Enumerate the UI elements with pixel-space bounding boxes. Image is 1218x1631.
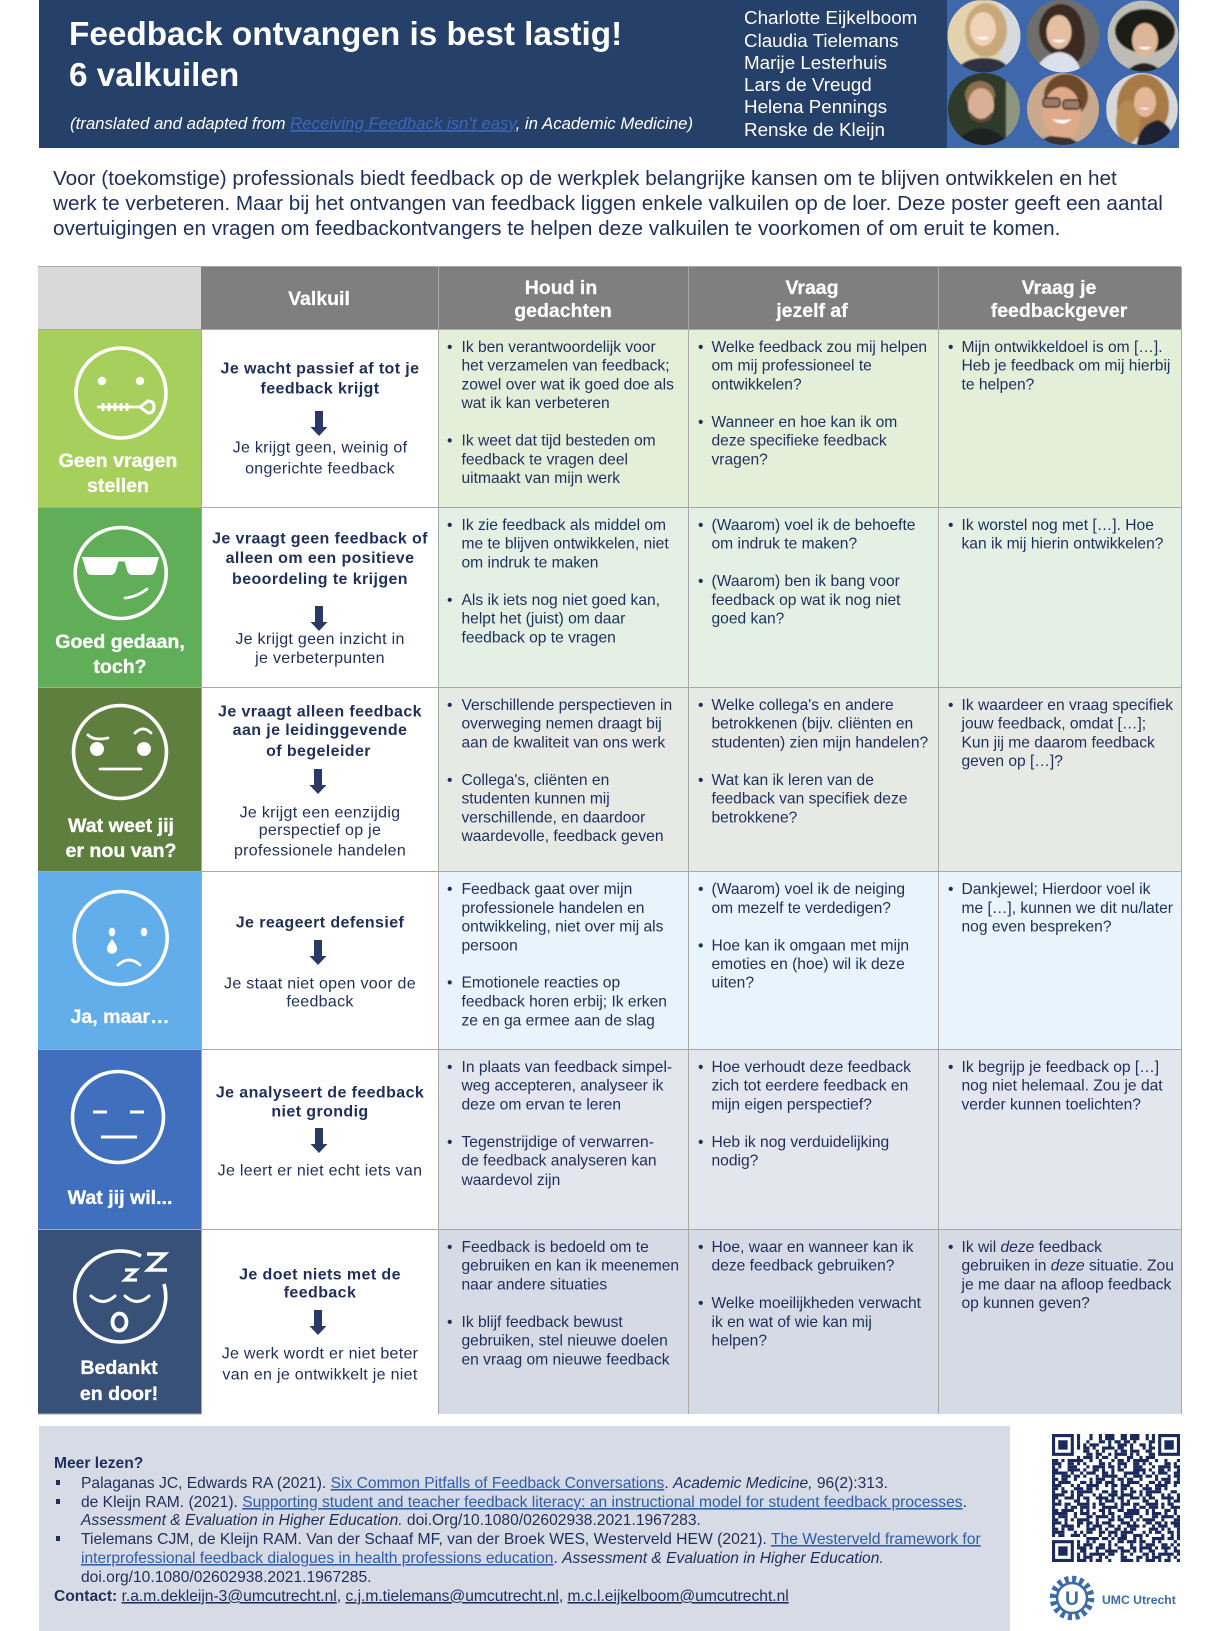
further reading panel — [39, 1426, 1010, 1631]
column heading: Vraag je feedbackgever: Vraag je — [1022, 277, 1097, 299]
thoughts cell: Ik zie feedback als middel om — [462, 517, 666, 534]
photo: Marije — [1107, 0, 1179, 76]
self-questions cell: ik en wat of wie kan mij — [712, 1314, 872, 1331]
thoughts cell: • — [447, 1239, 452, 1256]
thoughts cell: verschillende, en daardoor — [462, 809, 645, 826]
self-questions cell: Wat kan ik leren van de — [712, 772, 874, 789]
photo: Claudia — [1026, 0, 1100, 76]
self-questions cell: • — [698, 937, 703, 954]
questions for giver cell: • — [948, 1059, 953, 1076]
pitfall cell: Je doet niets met de — [239, 1266, 401, 1284]
self-questions cell — [698, 881, 909, 992]
logo mark: U — [1065, 1589, 1079, 1610]
self-questions cell — [698, 697, 929, 826]
pitfall cell: Je krijgt geen, weinig of — [233, 440, 408, 456]
questions for giver cell: Kun jij me daarom feedback — [962, 734, 1155, 751]
reference 3: interprofessional feedback dialogues in health professions education. Assessment & Evaluation in Higher Education. — [81, 1550, 884, 1567]
arrow — [310, 940, 326, 965]
reference 3 — [56, 1531, 981, 1586]
self-questions cell: betrokkenen (bijv. cliënten en — [712, 716, 913, 733]
thoughts cell: om indruk te maken — [462, 554, 598, 571]
reference 3: Tielemans CJM, de Kleijn RAM. Van der Schaaf MF, van der Broek WES, Westerveld HEW (2021). The Westerveld framework for — [81, 1531, 981, 1548]
photo: Lars — [947, 72, 1022, 148]
label: stellen — [87, 475, 149, 497]
reference 2 — [56, 1494, 967, 1529]
thoughts cell: • — [447, 697, 452, 714]
introduction text: werk te verbeteren. Maar bij het ontvangen van feedback liggen enkele valkuilen op de loer. Deze poster geeft een aantal — [52, 192, 1163, 215]
thoughts cell: Feedback is bedoeld om te — [462, 1239, 649, 1256]
introduction text: overtuigingen en vragen om feedbackontvangers te helpen deze valkuilen te voorkomen of om eruit te komen. — [53, 217, 1060, 240]
label: Wat jij wil... — [68, 1187, 172, 1209]
icon: zipped-mouth face — [76, 348, 166, 438]
thoughts cell: deze om ervan te leren — [462, 1096, 621, 1114]
column heading: Vraag je feedbackgever — [991, 277, 1128, 322]
label: toch? — [93, 656, 147, 678]
self-questions cell — [698, 517, 915, 628]
thoughts cell: In plaats van feedback simpel- — [462, 1059, 672, 1076]
pitfall cell — [212, 530, 428, 667]
thoughts cell: feedback horen erbij; Ik erken — [462, 993, 667, 1010]
UMC Utrecht logo — [1053, 1579, 1176, 1617]
pitfall cell — [216, 1084, 424, 1180]
questions for giver cell: verder kunnen toelichten? — [962, 1096, 1141, 1114]
questions for giver cell — [948, 881, 1173, 936]
column heading: Vraag jezelf af — [775, 277, 848, 322]
category cell — [38, 1229, 201, 1414]
thoughts cell: Feedback gaat over mijn — [462, 881, 632, 898]
questions for giver cell — [948, 517, 1164, 553]
icon: sunglasses face — [75, 528, 166, 618]
self-questions cell: (Waarom) voel ik de behoefte — [712, 517, 915, 534]
self-questions cell: mijn eigen perspectief? — [712, 1096, 872, 1114]
label: Geen vragen — [59, 450, 177, 472]
self-questions cell: zich tot eerdere feedback en — [712, 1078, 908, 1095]
self-questions cell: • — [698, 1239, 703, 1256]
heading: Meer lezen: Meer lezen? — [54, 1455, 143, 1472]
thoughts cell: het verzamelen van feedback; — [462, 358, 670, 375]
thoughts cell — [447, 339, 674, 487]
questions for giver cell: nog even bespreken? — [962, 918, 1112, 936]
self-questions cell: • — [698, 573, 703, 590]
self-questions cell: uiten? — [712, 975, 754, 992]
thoughts cell: gebruiken, stel nieuwe doelen — [462, 1333, 668, 1350]
category cell — [38, 871, 201, 1049]
label: Bedankt — [80, 1357, 158, 1379]
reference 2: de Kleijn RAM. (2021). Supporting student and teacher feedback literacy: an instructional model for student feedback processes. — [81, 1494, 967, 1511]
thoughts cell: ze en ga ermee aan de slag — [462, 1013, 655, 1030]
column heading: Houd in gedachten: gedachten — [514, 300, 612, 322]
pitfall cell: feedback krijgt — [261, 380, 380, 398]
self-questions cell: om indruk te maken? — [712, 536, 857, 553]
column heading: Vraag jezelf af: jezelf af — [775, 300, 848, 322]
thoughts cell: ontwikkeling, niet over mij als — [462, 918, 664, 936]
arrow — [310, 606, 328, 631]
self-questions cell: Welke feedback zou mij helpen — [712, 339, 927, 356]
author names: Renske de Kleijn — [744, 119, 885, 140]
self-questions cell: Welke moeilijkheden verwacht — [712, 1295, 922, 1312]
self-questions cell: feedback op wat ik nog niet — [712, 592, 901, 609]
thoughts cell: waardevol zijn — [460, 1172, 560, 1189]
label — [55, 631, 185, 678]
thoughts cell: weg accepteren, analyseer ik — [460, 1078, 664, 1095]
introduction text — [52, 167, 1163, 240]
self-questions cell — [698, 339, 927, 468]
arrow — [310, 1310, 326, 1335]
thoughts cell: studenten kunnen mij — [462, 791, 610, 808]
questions for giver cell — [948, 1059, 1163, 1114]
thoughts cell: naar andere situaties — [462, 1276, 607, 1294]
pitfall cell: alleen om een positieve — [226, 550, 414, 567]
category cell — [38, 329, 201, 507]
thoughts cell: overweging nemen draagt bij — [462, 716, 662, 733]
author names — [744, 7, 917, 140]
pitfall cell: Je wacht passief af tot je — [221, 360, 419, 378]
self-questions cell: goed kan? — [712, 610, 785, 628]
thoughts cell: • — [447, 433, 452, 450]
pitfall cell: perspectief op je — [259, 822, 381, 839]
self-questions cell: • — [698, 1059, 703, 1076]
reference 3: doi.org/10.1080/02602938.2021.1967285. — [81, 1569, 372, 1586]
pitfall cell — [218, 704, 422, 860]
questions for giver cell: Ik waardeer en vraag specifiek — [962, 697, 1173, 714]
pitfall cell: je verbeterpunten — [254, 650, 385, 667]
thoughts cell: • — [447, 881, 452, 898]
questions for giver cell: Ik wil deze feedback — [962, 1239, 1102, 1256]
thoughts cell: uitmaakt van mijn werk — [462, 470, 620, 487]
category cell — [38, 1049, 201, 1229]
column heading: Houd in gedachten: Houd in — [525, 277, 597, 299]
label — [59, 450, 177, 497]
label: en door! — [80, 1383, 158, 1405]
thoughts cell: Als ik iets nog niet goed kan, — [462, 592, 660, 609]
author names: Charlotte Eijkelboom — [744, 7, 917, 28]
pitfall cell: Je analyseert de feedback — [216, 1084, 424, 1102]
pitfall cell: Je reageert defensief — [236, 914, 405, 932]
thoughts cell: feedback te vragen deel — [462, 451, 628, 468]
self-questions cell: betrokkene? — [712, 809, 798, 826]
thoughts cell: feedback op te vragen — [462, 629, 616, 646]
thoughts cell — [447, 1239, 679, 1368]
title: 6 valkuilen — [69, 57, 239, 94]
self-questions cell: • — [698, 881, 703, 898]
label — [80, 1357, 158, 1405]
column heading: Vraag jezelf af: Vraag — [785, 277, 839, 299]
thoughts cell: • — [447, 517, 452, 534]
row 5: Wat jij wil... — [38, 1049, 1181, 1229]
thoughts cell: gebruiken en kan ik meenemen — [462, 1258, 679, 1275]
self-questions cell: ontwikkelen? — [712, 376, 802, 393]
questions for giver cell: me […], kunnen we dit nu/later — [962, 900, 1173, 917]
self-questions cell: Hoe kan ik omgaan met mijn — [712, 937, 909, 954]
questions for giver cell — [948, 339, 1170, 393]
thoughts cell: de feedback analyseren kan — [462, 1153, 657, 1170]
QR code — [1052, 1434, 1180, 1562]
label — [65, 815, 177, 862]
self-questions cell: om mezelf te verdedigen? — [712, 900, 891, 917]
self-questions cell: deze specifieke feedback — [712, 433, 887, 450]
thoughts cell — [447, 881, 667, 1030]
icon: crying face — [74, 892, 167, 984]
self-questions cell: studenten) zien mijn handelen? — [712, 734, 929, 751]
reference 2: Assessment & Evaluation in Higher Education. doi.Org/10.1080/02602938.2021.1967283. — [80, 1512, 701, 1529]
pitfall cell — [224, 914, 416, 1010]
self-questions cell: • — [698, 1134, 703, 1151]
pitfall cell: Je vraagt geen feedback of — [212, 530, 428, 548]
self-questions cell: • — [698, 697, 703, 714]
photo: Charlotte — [947, 0, 1022, 76]
author names: Marije Lesterhuis — [744, 52, 887, 73]
self-questions cell — [698, 1239, 922, 1350]
column heading: Vraag je feedbackgever: feedbackgever — [991, 300, 1128, 322]
self-questions cell: Wanneer en hoe kan ik om — [712, 414, 897, 431]
self-questions cell: • — [698, 517, 703, 534]
row 4: Ja, maar... — [38, 871, 1181, 1049]
self-questions cell — [698, 1059, 911, 1170]
row 2: Goed gedaan, toch? — [38, 507, 1181, 687]
label: Wat weet jij — [68, 815, 174, 837]
questions for giver cell: nog niet helemaal. Zou je dat — [962, 1078, 1163, 1095]
author photos panel — [947, 0, 1179, 150]
thoughts cell: zowel over wat ik goed doe als — [462, 376, 674, 393]
thoughts cell: • — [447, 339, 452, 356]
self-questions cell: Hoe, waar en wanneer kan ik — [712, 1239, 914, 1256]
thoughts cell: wat ik kan verbeteren — [460, 395, 610, 412]
self-questions cell: helpen? — [712, 1333, 767, 1350]
thoughts cell: waardevolle, feedback geven — [460, 828, 664, 845]
pitfall cell: ongerichte feedback — [245, 460, 396, 478]
title: Feedback ontvangen is best lastig! — [69, 16, 622, 53]
questions for giver cell: Dankjewel; Hierdoor voel ik — [962, 881, 1151, 898]
pitfall cell: feedback — [284, 1284, 356, 1302]
pitfall cell: niet grondig — [271, 1104, 369, 1120]
self-questions cell: deze feedback gebruiken? — [712, 1258, 895, 1275]
questions for giver cell: Heb je feedback om mij hierbij — [962, 358, 1170, 375]
category cell — [38, 507, 201, 687]
questions for giver cell: gebruiken in deze situatie. Zou — [962, 1258, 1174, 1275]
questions for giver cell: • — [948, 339, 953, 356]
pitfall cell: professionele handelen — [234, 842, 406, 860]
questions for giver cell: Ik begrijp je feedback op […] — [962, 1059, 1159, 1076]
thoughts cell: Verschillende perspectieven in — [462, 697, 672, 714]
questions for giver cell: je me daar na afloop feedback — [960, 1276, 1171, 1294]
self-questions cell: Welke collega's en andere — [712, 697, 894, 714]
thoughts cell — [447, 1059, 672, 1189]
pitfall cell: of begeleider — [266, 743, 371, 760]
thoughts cell: Tegenstrijdige of verwarren- — [462, 1134, 654, 1151]
title — [69, 16, 622, 94]
subtitle with source link: (translated and adapted from Receiving Feedback isn’t easy, in Academic Medicine) — [70, 114, 693, 133]
self-questions cell: • — [698, 339, 703, 356]
author names: Helena Pennings — [744, 96, 887, 117]
self-questions cell: • — [698, 414, 703, 431]
thoughts cell — [447, 517, 669, 646]
thoughts cell: • — [447, 1059, 452, 1076]
thoughts cell: • — [447, 1314, 452, 1331]
thoughts cell: helpt het (juist) om daar — [462, 610, 625, 628]
category cell — [38, 687, 201, 871]
questions for giver cell — [948, 1239, 1174, 1312]
pitfall cell: Je krijgt geen inzicht in — [235, 631, 405, 648]
self-questions cell: Heb ik nog verduidelijking — [712, 1134, 889, 1151]
photo: Helena — [1026, 72, 1100, 146]
questions for giver cell: op kunnen geven? — [962, 1295, 1090, 1312]
arrow — [310, 1128, 328, 1153]
icon: neutral face — [72, 1072, 164, 1162]
thoughts cell: Ik weet dat tijd besteden om — [462, 433, 656, 450]
thoughts cell: persoon — [462, 937, 518, 954]
header banner — [39, 0, 1179, 150]
questions for giver cell: Ik worstel nog met […]. Hoe — [962, 517, 1154, 534]
self-questions cell: vragen? — [712, 451, 768, 468]
logo wordmark: UMC Utrecht — [1102, 1593, 1176, 1607]
row 6: Bedankt en door! — [38, 1229, 1181, 1414]
self-questions cell: emoties en (hoe) wil ik deze — [712, 956, 905, 973]
label: Ja, maar… — [70, 1006, 170, 1028]
questions for giver cell: • — [948, 697, 953, 714]
author names: Lars de Vreugd — [744, 74, 872, 95]
column heading: Valkuil: Valkuil — [288, 288, 350, 310]
icon: sleeping face — [75, 1251, 167, 1342]
thoughts cell: Ik ben verantwoordelijk voor — [462, 339, 656, 356]
questions for giver cell: kan ik mij hierin ontwikkelen? — [962, 536, 1164, 553]
thoughts cell: Collega's, cliënten en — [462, 772, 609, 789]
introduction text: Voor (toekomstige) professionals biedt feedback op de werkplek belangrijke kansen om te blijven ontwikkelen en het — [53, 167, 1117, 190]
self-questions cell: (Waarom) ben ik bang voor — [712, 573, 900, 590]
thoughts cell: me te blijven ontwikkelen, niet — [462, 536, 669, 553]
pitfall cell: Je krijgt een eenzijdig — [240, 804, 400, 822]
thoughts cell: professionele handelen en — [462, 900, 644, 917]
contact line: Contact: r.a.m.dekleijn-3@umcutrecht.nl, c.j.m.tielemans@umcutrecht.nl, m.c.l.eijkelboom@umcutrecht.nl — [54, 1588, 789, 1605]
self-questions cell: • — [698, 1295, 703, 1312]
column heading: Houd in gedachten — [514, 277, 612, 322]
pitfall cell: feedback — [286, 994, 354, 1010]
questions for giver cell — [948, 697, 1173, 770]
self-questions cell: feedback van specifiek deze — [712, 791, 907, 808]
self-questions cell: • — [698, 772, 703, 789]
pitfall cell: van en je ontwikkelt je niet — [222, 1366, 418, 1384]
table header row — [38, 266, 1181, 329]
pitfall cell: Je leert er niet echt iets van — [218, 1162, 422, 1180]
questions for giver cell: jouw feedback, omdat […]; — [960, 716, 1146, 733]
pitfall cell: Je vraagt alleen feedback — [218, 704, 422, 720]
thoughts cell — [447, 697, 672, 845]
thoughts cell: Emotionele reacties op — [462, 975, 620, 992]
photo: Renske — [1106, 72, 1178, 150]
questions for giver cell: Mijn ontwikkeldoel is om […]. — [962, 339, 1163, 356]
thoughts cell: • — [447, 1134, 452, 1151]
pitfall cell — [222, 1266, 419, 1384]
pitfall cell: Je werk wordt er niet beter — [222, 1346, 419, 1362]
row 1: Geen vragen stellen — [38, 329, 1181, 507]
arrow — [310, 411, 328, 436]
icon: sceptical face — [74, 706, 166, 798]
questions for giver cell: • — [948, 1239, 953, 1256]
pitfall cell — [221, 360, 419, 478]
questions for giver cell: geven op […]? — [962, 753, 1063, 770]
label: Goed gedaan, — [55, 631, 185, 653]
row 3: Wat weet jij er nou van? — [38, 687, 1181, 871]
self-questions cell: (Waarom) voel ik de neiging — [712, 881, 905, 898]
pitfall cell: beoordeling te krijgen — [232, 571, 408, 588]
questions for giver cell: te helpen? — [962, 376, 1035, 393]
thoughts cell: • — [447, 975, 452, 992]
label: er nou van? — [65, 840, 177, 862]
thoughts cell: Ik blijf feedback bewust — [462, 1314, 623, 1331]
thoughts cell: en vraag om nieuwe feedback — [462, 1351, 670, 1368]
thoughts cell: • — [447, 592, 452, 609]
self-questions cell: Hoe verhoudt deze feedback — [712, 1059, 911, 1076]
questions for giver cell: • — [948, 881, 953, 898]
self-questions cell: om mij professioneel te — [712, 358, 872, 375]
arrow — [310, 769, 326, 794]
thoughts cell: aan de kwaliteit van ons werk — [462, 734, 665, 751]
thoughts cell: • — [447, 772, 452, 789]
questions for giver cell: • — [948, 517, 953, 534]
pitfall cell: Je staat niet open voor de — [224, 976, 416, 992]
reference 1: Palaganas JC, Edwards RA (2021). Six Common Pitfalls of Feedback Conversations. Academic Medicine, 96(2):313. — [81, 1475, 888, 1492]
author names: Claudia Tielemans — [744, 30, 899, 51]
pitfall cell: aan je leidinggevende — [233, 722, 407, 739]
self-questions cell: nodig? — [712, 1153, 759, 1170]
